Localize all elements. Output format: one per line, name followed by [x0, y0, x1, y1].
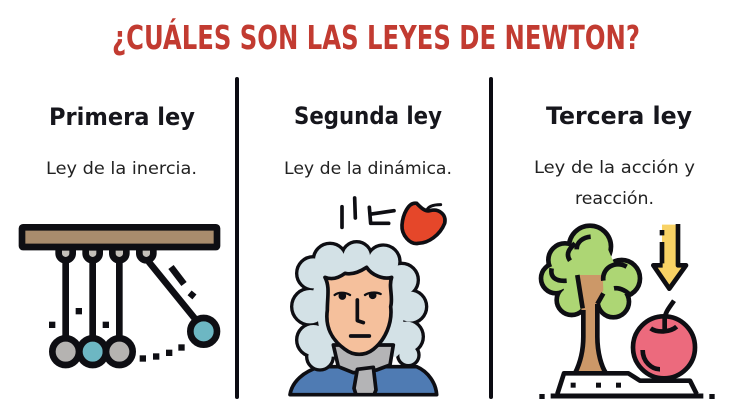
icon: newton with apple [290, 198, 445, 395]
text: reaccion: reacción. [575, 189, 654, 209]
nose [357, 300, 363, 323]
strings [66, 261, 196, 337]
motion lines [342, 198, 394, 227]
panel: tercera ley [534, 102, 715, 399]
face [325, 267, 392, 354]
down arrow [652, 225, 687, 290]
cravat [354, 367, 376, 395]
foliage outline [543, 228, 638, 315]
trunk [575, 275, 606, 373]
text: ley de la dinamica: Ley de la dinámica. [284, 159, 452, 179]
apple [633, 316, 695, 378]
icon: newton's cradle [22, 227, 217, 365]
text: ley de la inercia: Ley de la inercia. [46, 159, 197, 179]
body [290, 367, 437, 395]
motion marks [171, 267, 184, 284]
divider: left [235, 77, 239, 399]
panel: primera ley [22, 103, 217, 365]
panel: segunda ley [284, 102, 452, 395]
collar [333, 345, 393, 373]
mouth [351, 330, 369, 341]
wig fill [293, 243, 425, 368]
hooks [59, 247, 153, 260]
apple [402, 203, 445, 244]
balls [52, 338, 79, 365]
eyes and mouth [335, 293, 381, 295]
heading: segunda ley: Segunda ley [294, 102, 442, 130]
divider: right [489, 77, 493, 399]
icon: tree and apple [539, 224, 715, 399]
frame bar [22, 227, 217, 247]
foliage fill [543, 228, 638, 315]
heading: primera ley: Primera ley [49, 103, 195, 131]
heading: tercera ley: Tercera ley [546, 102, 692, 130]
ground [557, 373, 697, 394]
text: ley de la accion y reaccion: Ley de la acción y [534, 158, 695, 178]
wig outline [293, 243, 425, 368]
